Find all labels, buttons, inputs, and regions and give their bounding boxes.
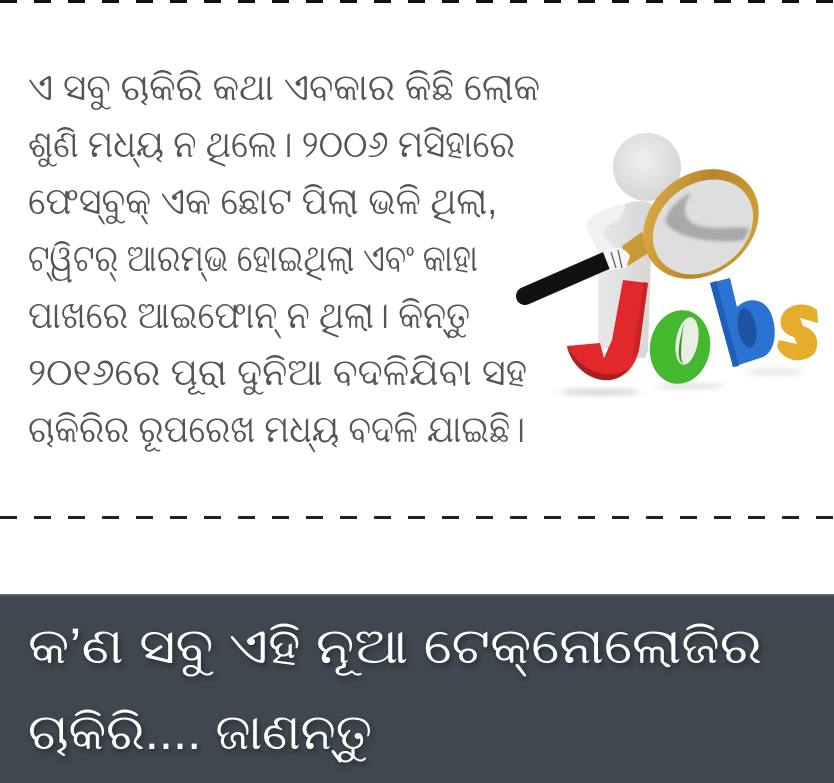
letter b xyxy=(710,278,775,367)
letter s xyxy=(777,304,818,360)
heading text xyxy=(28,618,762,763)
figure body xyxy=(598,201,652,358)
letter J xyxy=(567,280,648,380)
body paragraph: ୨୦୧୬ରେ ପୂରା ଦୁନିଆ ବଦଳିଯିବା ସହ xyxy=(28,352,527,396)
body paragraph: ଟ୍ୱିଟର୍ ଆରମ୍ଭ ହୋଇଥିଲା ଏବଂ କାହା xyxy=(28,238,478,282)
body paragraph xyxy=(28,67,540,453)
magnifying glass xyxy=(525,146,781,302)
body paragraph: ଏ ସବୁ ଚାକିରି କଥା ଏବକାର କିଛି ଲୋକ xyxy=(28,67,540,111)
body paragraph: ପାଖରେ ଆଇଫୋନ୍ ନ ଥିଲା। କିନ୍ତୁ xyxy=(28,295,470,339)
heading text: କ’ଣ ସବୁ ଏହି ନୂଆ ଟେକ୍ନୋଲୋଜିର xyxy=(28,618,762,677)
letter o xyxy=(644,305,716,389)
body paragraph: ଚାକିରିର ରୂପରେଖ ମଧ୍ୟ ବଦଳି ଯାଇଛି। xyxy=(28,409,525,453)
body paragraph: ଫେସ୍‌ବୁକ୍ ଏକ ଛୋଟ ପିଲା ଭଳି ଥିଲା, xyxy=(28,181,497,225)
body paragraph: ଶୁଣି ମଧ୍ୟ ନ ଥିଲେ। ୨୦୦୬ ମସିହାରେ xyxy=(28,124,515,168)
heading text: ଚାକିରି.... ଜାଣନ୍ତୁ xyxy=(28,704,372,763)
heading band xyxy=(0,594,834,783)
icon: figure with magnifying glass and Jobs lettering xyxy=(525,133,818,394)
